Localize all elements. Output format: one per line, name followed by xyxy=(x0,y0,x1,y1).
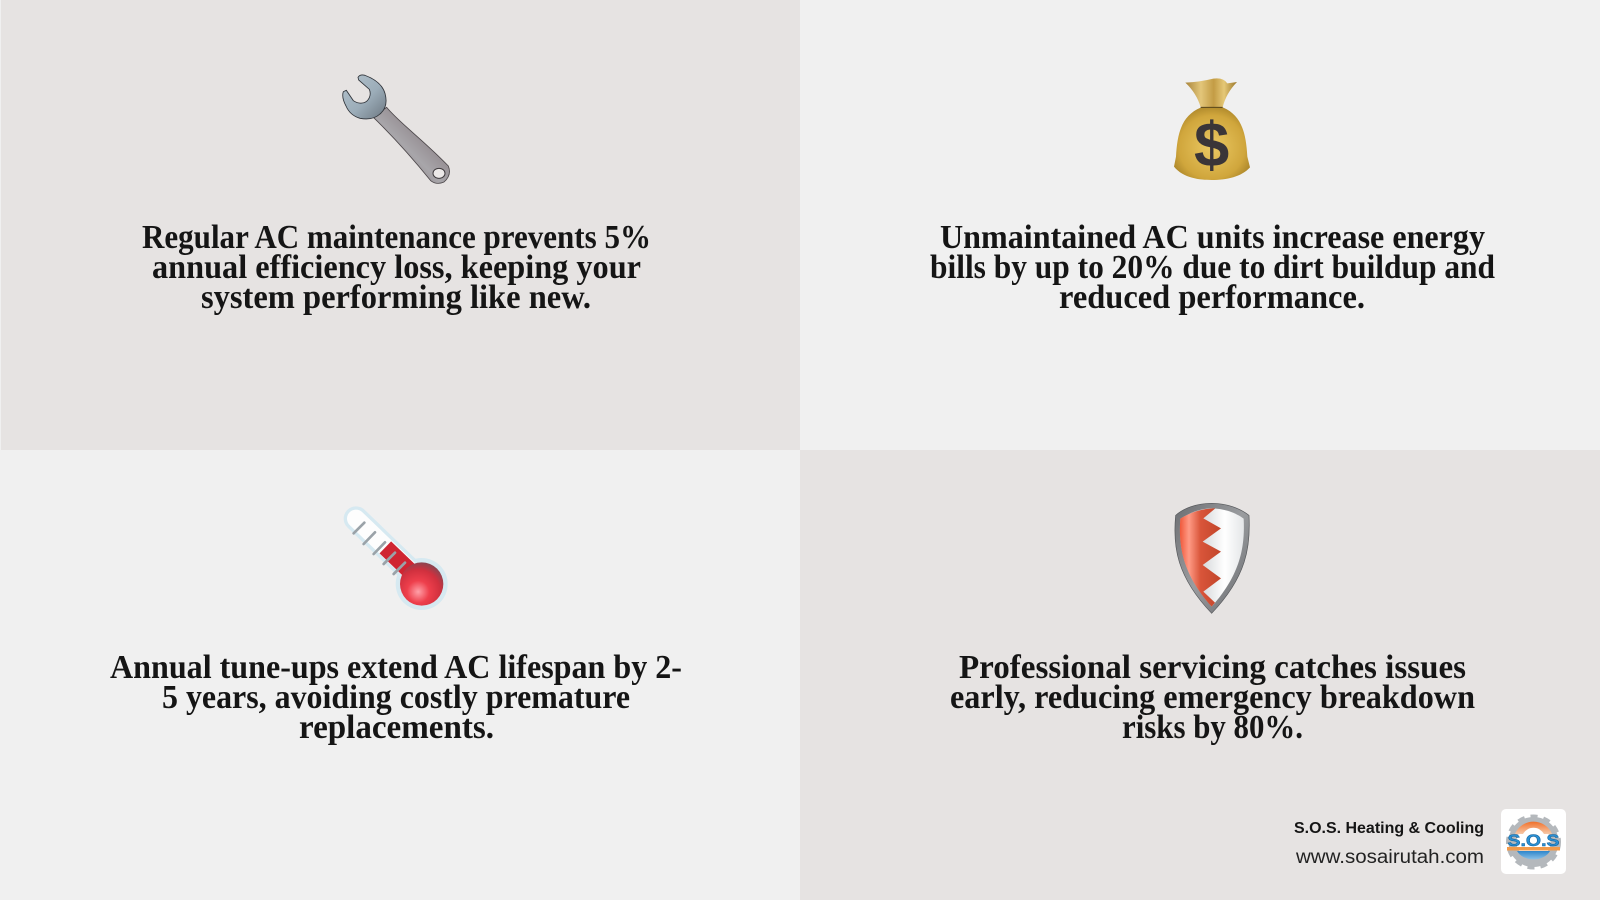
logo: S.O.S badge: S.O.S xyxy=(1508,831,1560,850)
text: bottom-right statement: risks by 80%. xyxy=(1122,709,1303,746)
text: top-right statement: bills by up to 20% due to dirt buildup and xyxy=(930,249,1495,286)
text: bottom-left statement: Annual tune-ups extend AC lifespan by 2- xyxy=(110,649,682,686)
panel: bottom-right background xyxy=(800,450,1600,900)
text: top-left statement: system performing like new. xyxy=(201,279,591,316)
dollar sign: $ xyxy=(1194,110,1229,180)
text: bottom-right statement: early, reducing emergency breakdown xyxy=(950,679,1475,716)
panel: top-left background xyxy=(1,0,800,450)
text: top-right statement: reduced performance. xyxy=(1059,279,1365,316)
text: top-left statement xyxy=(142,219,651,316)
text: bottom-left statement: replacements. xyxy=(299,709,494,746)
text: top-left statement: annual efficiency loss, keeping your xyxy=(152,249,641,286)
icon: shield xyxy=(1175,503,1249,613)
logo: S.O.S badge xyxy=(1501,809,1566,874)
icon: thermometer xyxy=(354,519,448,610)
text: bottom-left statement: 5 years, avoiding costly premature xyxy=(162,679,630,716)
footer: company name: S.O.S. Heating & Cooling xyxy=(1294,820,1484,837)
panel: top-right background xyxy=(800,0,1600,450)
icon: wrench xyxy=(343,75,449,183)
text: bottom-left statement xyxy=(110,649,682,746)
text: top-left statement: Regular AC maintenance prevents 5% xyxy=(142,219,651,256)
footer: website: www.sosairutah.com xyxy=(1295,847,1484,868)
text: bottom-right statement xyxy=(950,649,1475,746)
text: top-right statement: Unmaintained AC units increase energy xyxy=(940,219,1485,256)
text: bottom-right statement: Professional servicing catches issues xyxy=(959,649,1466,686)
panel: bottom-left background xyxy=(0,450,800,900)
icon: money bag xyxy=(1174,78,1250,180)
text: top-right statement xyxy=(930,219,1495,316)
